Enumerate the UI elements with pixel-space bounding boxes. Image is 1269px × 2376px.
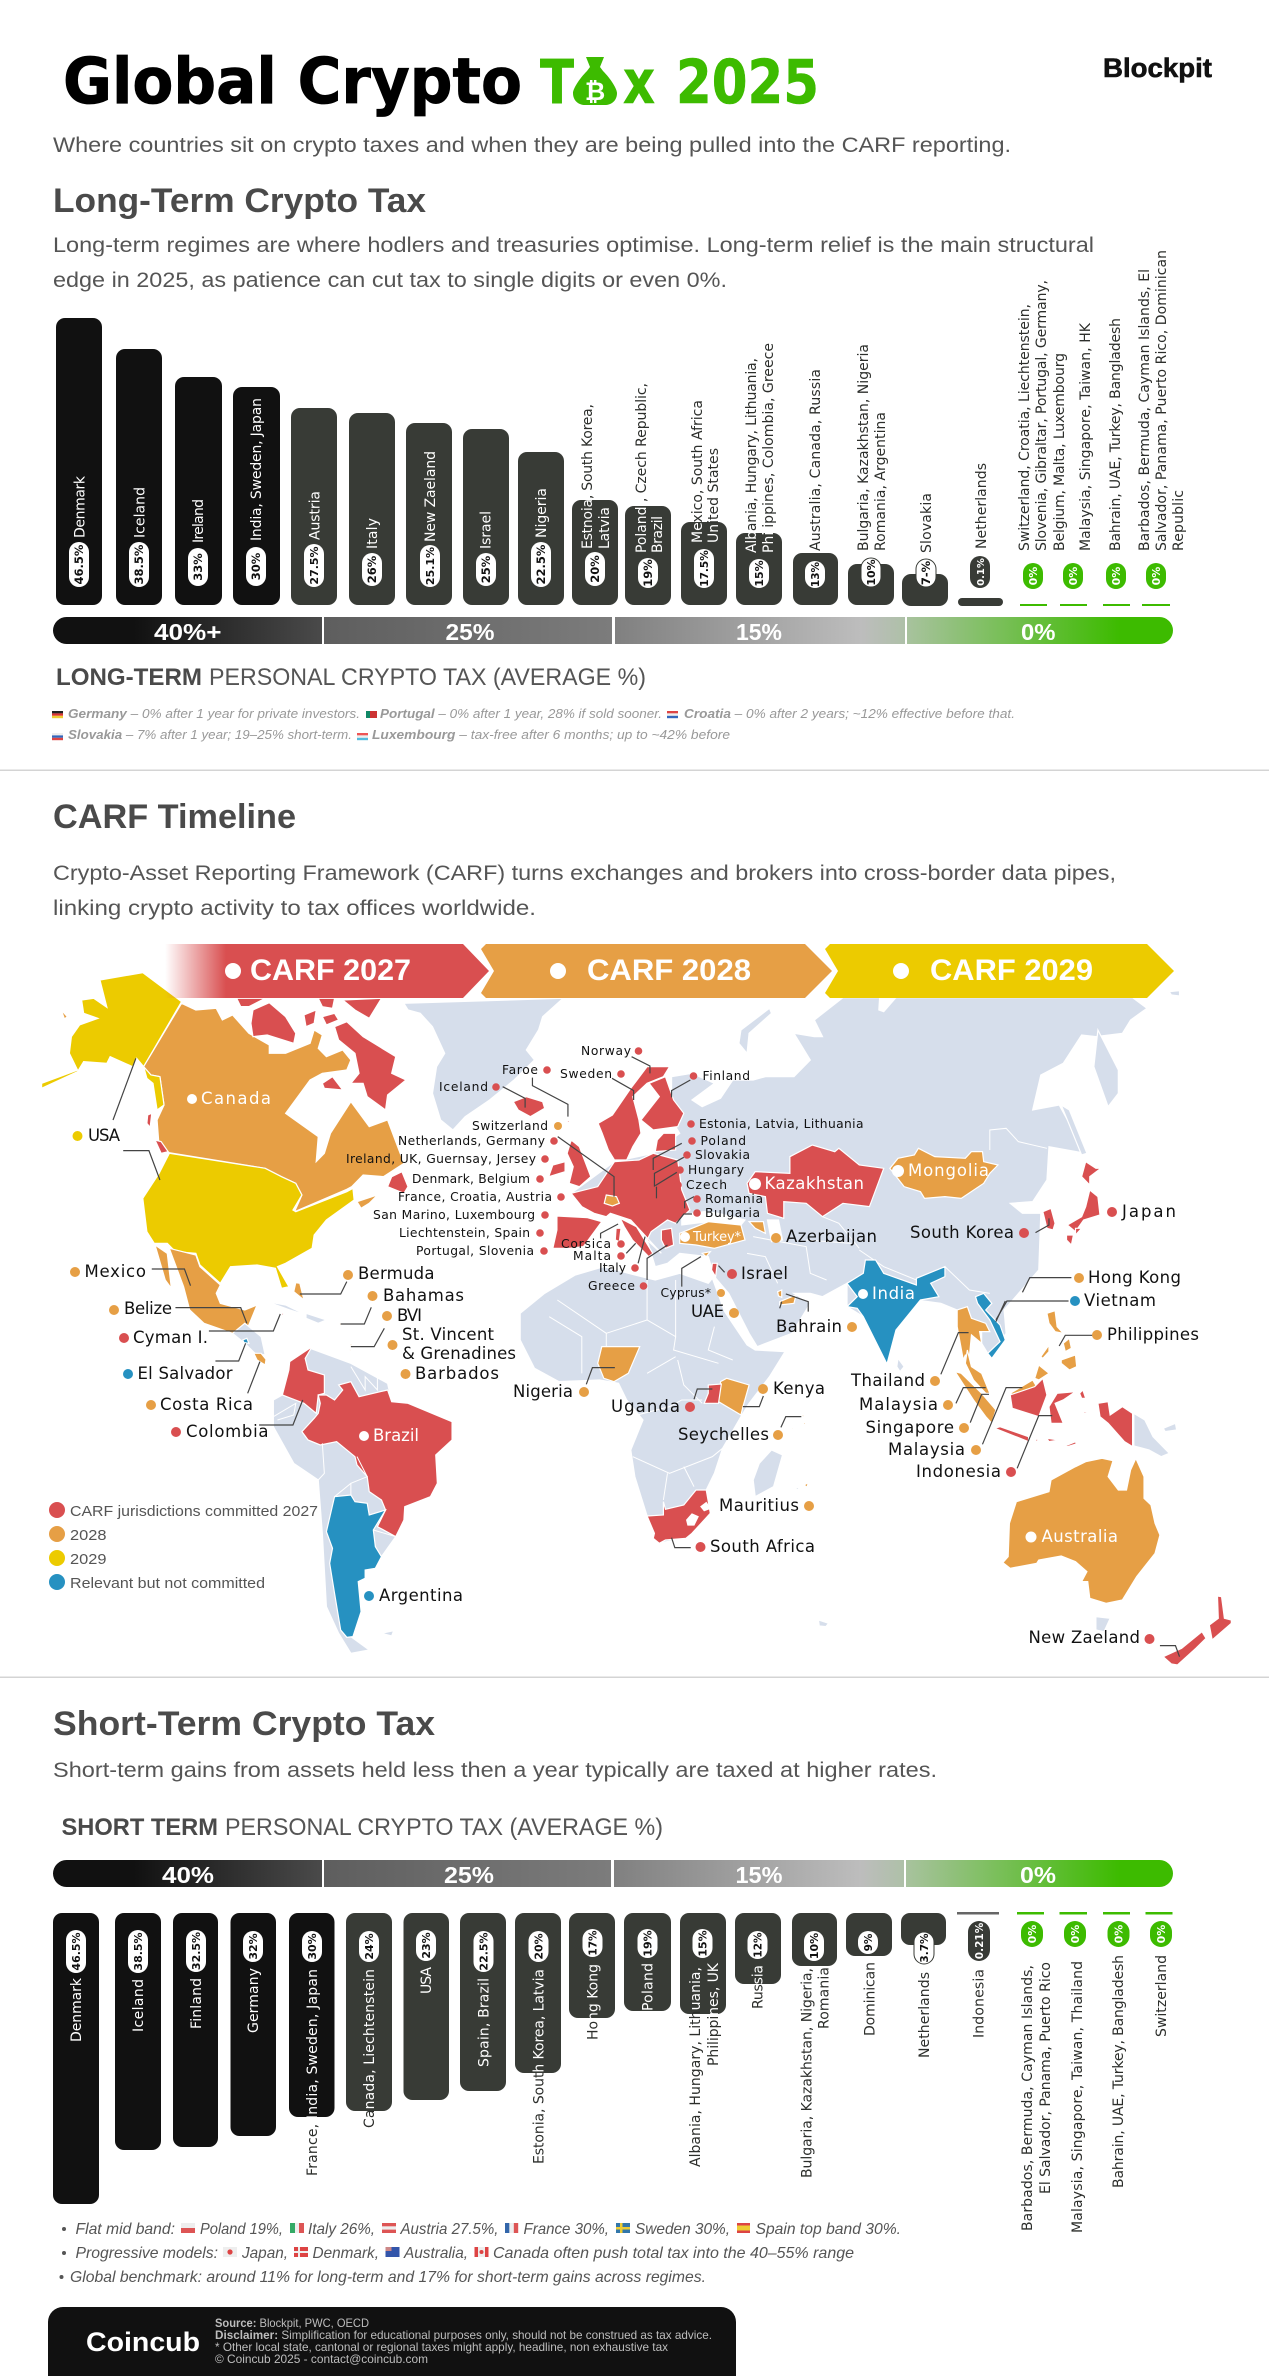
logo: Coincub: Coincub	[86, 2327, 200, 2357]
map: africa	[520, 1267, 829, 1627]
bar chart: long-term tax: 27.5%	[308, 546, 321, 585]
map labels: africa, asia, oceania: Japan	[1121, 1202, 1176, 1221]
bar chart: short-term tax: 12%	[752, 1932, 764, 1958]
map labels: africa, asia, oceania: Hong Kong	[1088, 1268, 1181, 1287]
bullet notes: Austria 27.5%,	[400, 2221, 498, 2238]
bar chart: short-term tax: 0%	[1155, 1925, 1168, 1943]
map labels: small europe: Liechtenstein, Spain	[399, 1226, 530, 1240]
map labels: americas: Bahamas	[383, 1286, 464, 1305]
heading: short-term crypto tax: Short-Term Crypto Tax	[53, 1705, 435, 1743]
long-term intro text	[53, 234, 1094, 292]
map labels: small europe: Italy	[599, 1261, 626, 1275]
map labels: africa, asia, oceania: Thailand	[850, 1371, 925, 1390]
country labels: New Zaeland	[423, 451, 439, 542]
map labels: small europe: Portugal, Slovenia	[416, 1244, 534, 1258]
map labels: africa, asia, oceania: Israel	[741, 1264, 788, 1283]
country labels: Brazil	[650, 516, 666, 553]
map: eurasia	[549, 991, 1180, 1363]
map labels: africa, asia, oceania: Azerbaijan	[786, 1227, 877, 1246]
short-term intro text: Short-term gains from assets held less then a year typically are taxed at higher rates.	[53, 1759, 937, 1782]
map labels: americas: St. Vincent	[402, 1325, 495, 1344]
map labels: americas: Barbados	[415, 1364, 499, 1383]
title	[63, 45, 819, 118]
bar chart: short-term tax: 10%	[808, 1933, 821, 1959]
country labels: Russia	[750, 1965, 766, 2009]
map labels: small europe: Greece	[588, 1279, 635, 1293]
bar chart: long-term tax: 30%	[249, 552, 263, 580]
country labels: Latvia	[597, 507, 613, 549]
bar chart: short-term tax: 23%	[420, 1932, 433, 1959]
country labels	[72, 250, 1187, 553]
map labels: small europe: Malta	[573, 1249, 611, 1263]
country labels: USA	[419, 1967, 435, 1994]
chevron: CARF 2029	[825, 944, 1174, 998]
country labels: India, Sweden, Japan	[249, 398, 265, 541]
map labels: small europe: Sweden	[560, 1067, 612, 1081]
bar chart: long-term tax: 46.5%	[72, 544, 86, 584]
CARF intro text	[53, 862, 1116, 920]
map legend: 2028	[70, 1527, 106, 1544]
footer	[48, 2307, 736, 2376]
bar chart: long-term tax: 25.1%	[424, 547, 437, 585]
value pills	[66, 1921, 1172, 1973]
map labels: small europe	[346, 1044, 864, 1300]
rate band: short-term: 15%	[736, 1862, 782, 1888]
country labels: Romania, Argentina	[873, 412, 889, 551]
country labels: Estnoia, South Korea,	[580, 404, 596, 549]
country labels: Spain, Brazil	[476, 1978, 492, 2067]
map labels: americas: & Grenadines	[402, 1344, 516, 1363]
CARF intro text: linking crypto activity to tax offices worldwide.	[53, 897, 536, 920]
map labels: africa, asia, oceania: Vietnam	[1084, 1291, 1156, 1310]
long-term intro text: Long-term regimes are where hodlers and treasuries optimise. Long-term relief is the main structural	[53, 234, 1094, 257]
country labels: Barbados, Bermuda, Cayman Islands, El	[1137, 269, 1153, 551]
icon: bitcoin money bag: ₿	[585, 78, 605, 106]
map labels: americas	[70, 1089, 516, 1605]
rate band: short-term: 25%	[444, 1862, 494, 1888]
logo: Blockpit: Blockpit	[1103, 53, 1212, 83]
footnotes: long-term exceptions: Portugal – 0% after 1 year, 28% if sold sooner.	[380, 706, 662, 721]
footer sources and disclaimer: * Other local state, cantonal or regional taxes might apply, headline, non exhaustive tax	[215, 2340, 668, 2354]
map labels: small europe: Poland	[700, 1134, 746, 1148]
rate band: long-term: 40%+	[154, 619, 222, 645]
bar chart: long-term tax: 25%	[479, 555, 493, 583]
bullet notes: Australia,	[403, 2245, 468, 2262]
bullet notes	[60, 2221, 901, 2286]
heading: long-term crypto tax: Long-Term Crypto Tax	[53, 182, 426, 220]
map labels: africa, asia, oceania: Philippines	[1107, 1325, 1199, 1344]
map labels: americas: Brazil	[373, 1426, 419, 1445]
country labels: Netherlands	[917, 1972, 933, 2058]
map labels: small europe: Slovakia	[695, 1148, 750, 1162]
bullet notes: Spain top band 30%.	[756, 2221, 901, 2238]
chevron: CARF 2027: CARF 2027	[250, 954, 411, 987]
country labels: Iceland	[131, 1979, 147, 2032]
map labels: africa, asia, oceania: Singapore	[866, 1418, 954, 1437]
long-term intro text: edge in 2025, as patience can cut tax to single digits or even 0%.	[53, 269, 727, 292]
map labels: small europe: Ireland, UK, Guernsay, Jersey	[346, 1152, 536, 1166]
bar chart: short-term tax: 38.5%	[132, 1932, 145, 1971]
bar chart: long-term tax: 0%	[1150, 567, 1163, 585]
map labels: small europe: France, Croatia, Austria	[398, 1190, 552, 1204]
map labels: small europe: Cyprus*	[660, 1286, 711, 1300]
country labels: Israel	[478, 511, 494, 549]
country labels: Dominican	[862, 1962, 878, 2036]
bar chart: long-term tax: 17.5%	[699, 550, 711, 587]
country labels: Poland	[640, 1963, 656, 2011]
map: north america	[42, 973, 570, 1333]
bar chart: short-term tax: 24%	[363, 1933, 376, 1960]
bar chart: short-term tax: 9%	[863, 1933, 875, 1951]
map legend: CARF jurisdictions committed 2027	[70, 1503, 318, 1520]
map labels: americas: Mexico	[84, 1262, 146, 1281]
footer sources and disclaimer: Source: Blockpit, PWC, OECD	[215, 2316, 369, 2330]
map labels: americas: Cyman I.	[133, 1328, 208, 1347]
footnotes: long-term exceptions: Luxembourg – tax-free after 6 months; up to ~42% before	[372, 727, 730, 742]
bar chart: long-term tax: 22.5%	[534, 544, 548, 584]
map: leader lines	[113, 1057, 1180, 1657]
map labels: small europe: Czech	[686, 1178, 727, 1192]
map labels: small europe: San Marino, Luxembourg	[373, 1208, 535, 1222]
map labels: africa, asia, oceania: Malaysia	[888, 1440, 965, 1459]
map labels: small europe: Switzerland	[472, 1119, 548, 1133]
country labels: Belgium, Malta, Luxembourg	[1052, 353, 1068, 551]
country labels: Philippines, Colombia, Greece	[761, 343, 777, 553]
rate band: long-term	[53, 617, 1173, 645]
rate band: short-term: 40%	[162, 1862, 214, 1888]
map labels: americas: Bermuda	[358, 1264, 434, 1283]
country labels: Germany	[246, 1968, 262, 2033]
bullet notes: France 30%,	[524, 2221, 609, 2238]
country labels: United States	[706, 448, 722, 543]
chart title: short-term: PERSONAL CRYPTO TAX (AVERAGE %)	[225, 1814, 663, 1841]
bar chart: long-term tax: 38.5%	[132, 544, 146, 584]
country labels: Canada, Liechtenstein	[362, 1969, 378, 2128]
CARF intro text: Crypto-Asset Reporting Framework (CARF) turns exchanges and brokers into cross-border data pipes,	[53, 862, 1116, 885]
map labels: americas: Costa Rica	[160, 1395, 253, 1414]
country labels: Slovenia, Gibraltar, Portugal, Germany,	[1034, 280, 1050, 551]
map labels: small europe: Norway	[581, 1044, 631, 1058]
map labels: small europe: Estonia, Latvia, Lithuania	[699, 1117, 864, 1131]
footnotes: long-term exceptions: Slovakia – 7% after 1 year; 19–25% short-term.	[68, 727, 352, 742]
bullet notes: Sweden 30%,	[635, 2221, 730, 2238]
title: x	[623, 47, 655, 118]
bar chart: long-term tax: 33%	[191, 553, 205, 581]
country labels: Malaysia, Singapore, Taiwan, Thailand	[1070, 1961, 1086, 2233]
CARF timeline chevrons	[165, 944, 1174, 998]
country labels: Bahrain, UAE, Turkey, Bangladesh	[1111, 1955, 1127, 2188]
country labels: Finland	[189, 1978, 205, 2029]
bar chart: short-term tax: 32.5%	[190, 1932, 203, 1970]
map labels: africa, asia, oceania: Malaysia	[859, 1395, 938, 1414]
bullet notes: Global benchmark: around 11% for long-term and 17% for short-term gains across regimes.	[70, 2269, 706, 2286]
country labels: Denmark	[72, 475, 88, 538]
map labels: small europe: Faroe	[502, 1063, 538, 1077]
bar chart: short-term tax: 15%	[696, 1930, 710, 1957]
world map: CARF commitments	[42, 973, 1231, 1665]
rate band: long-term: 25%	[446, 619, 494, 645]
country labels: Iceland	[132, 487, 148, 538]
bullet notes: Japan,	[241, 2245, 288, 2262]
map labels: americas: Colombia	[186, 1422, 268, 1441]
map labels: africa, asia, oceania: South Africa	[710, 1537, 815, 1556]
country labels: Ireland	[191, 499, 207, 543]
footnotes: long-term exceptions: Germany – 0% after 1 year for private investors.	[68, 706, 360, 721]
bar chart: short-term tax: 3.7%	[919, 1933, 931, 1963]
heading: CARF timeline: CARF Timeline	[53, 798, 296, 836]
bar chart: long-term tax: 15%	[753, 560, 766, 587]
chart title: long-term: LONG-TERM	[56, 664, 202, 691]
bar chart: long-term tax: 13%	[810, 561, 822, 587]
map labels: africa, asia, oceania: Seychelles	[678, 1425, 769, 1444]
value pills	[69, 542, 1166, 589]
map labels: americas: Belize	[124, 1299, 172, 1318]
country labels: Bulgaria, Kazakhstan, Nigeria,	[800, 1968, 816, 2178]
icon: bitcoin money bag	[573, 57, 617, 106]
map labels: africa, asia, oceania: Turkey*	[692, 1230, 742, 1245]
map labels: small europe: Hungary	[688, 1163, 744, 1177]
bar chart: short-term tax: 22.5%	[478, 1932, 490, 1971]
bar chart: short-term tax: 32%	[247, 1933, 260, 1960]
footer sources and disclaimer: Disclaimer: Simplification for educational purposes only, should not be construed as tax advice.	[215, 2328, 712, 2342]
country labels	[69, 1955, 1170, 2233]
rate band: long-term: 15%	[736, 619, 782, 645]
bar chart: long-term tax: 0%	[1110, 567, 1123, 585]
map labels: africa, asia, oceania	[513, 1161, 1199, 1647]
map labels: africa, asia, oceania: South Korea	[910, 1223, 1014, 1242]
bar chart: long-term tax: 20%	[588, 555, 602, 583]
country labels: Salvador, Panama, Puerto Rico, Dominican	[1154, 250, 1170, 551]
map labels: africa, asia, oceania: Kenya	[773, 1379, 825, 1398]
bar chart: short-term tax: 0%	[1112, 1925, 1126, 1943]
title: 2025	[676, 47, 819, 118]
bar chart: short-term tax: 0%	[1069, 1925, 1082, 1943]
country labels: Switzerland, Croatia, Liechtenstein,	[1017, 304, 1033, 551]
map labels: americas: BVI	[397, 1306, 422, 1325]
map labels: africa, asia, oceania: Mauritius	[719, 1496, 799, 1515]
chart title: long-term: PERSONAL CRYPTO TAX (AVERAGE %)	[209, 664, 646, 691]
country labels: Mexico, South Africa	[690, 400, 706, 543]
title: Global Crypto	[63, 45, 522, 118]
country labels: Denmark	[69, 1977, 85, 2042]
bar chart: short-term tax: 30%	[306, 1933, 319, 1960]
map legend: Relevant but not committed	[70, 1575, 265, 1592]
footnotes: long-term exceptions	[52, 706, 1015, 742]
map labels: small europe: Romania	[705, 1192, 763, 1206]
bar chart: long-term tax: 0%	[1067, 567, 1080, 585]
bar chart: long-term tax: 0.1%	[976, 558, 987, 586]
chevron: CARF 2028: CARF 2028	[587, 954, 751, 987]
rate band: short-term	[53, 1860, 1173, 1888]
country labels: Netherlands	[974, 463, 990, 549]
chevron: CARF 2027	[165, 944, 489, 998]
map labels: americas: USA	[88, 1126, 121, 1145]
country labels: El Salvador, Panama, Puerto Rico	[1038, 1962, 1054, 2194]
map labels: africa, asia, oceania: Mongolia	[908, 1161, 989, 1180]
bullet notes: Poland 19%,	[200, 2221, 283, 2238]
map labels: africa, asia, oceania: New Zaeland	[1028, 1628, 1140, 1647]
map labels: small europe: Bulgaria	[705, 1206, 760, 1220]
map labels: africa, asia, oceania: Indonesia	[916, 1462, 1001, 1481]
bullet notes: Denmark,	[312, 2245, 379, 2262]
country labels: Philippines, UK	[706, 1962, 722, 2066]
map labels: small europe: Denmark, Belgium	[412, 1172, 530, 1186]
footnotes: long-term exceptions: Croatia – 0% after 2 years; ~12% effective before that.	[684, 706, 1015, 721]
country labels: Albania, Hungary, Lithuania,	[744, 358, 760, 553]
bar chart: long-term tax: 7-%	[919, 560, 933, 585]
country labels: Albania, Hungary, Lithuania,	[688, 1967, 704, 2167]
footer sources and disclaimer	[215, 2316, 712, 2366]
chart title: short-term: SHORT TERM	[62, 1814, 218, 1841]
map labels: americas: Canada	[201, 1089, 271, 1108]
bar chart: long-term tax: 0%	[1027, 567, 1040, 585]
country labels: Poland , Czech Republic,	[634, 383, 650, 553]
chevron: CARF 2028	[481, 944, 832, 998]
country labels: Malaysia, Singapore, Taiwan, HK	[1078, 322, 1094, 551]
map labels: africa, asia, oceania: Bahrain	[776, 1317, 842, 1336]
map labels: africa, asia, oceania: Australia	[1042, 1527, 1118, 1546]
map labels: small europe: Netherlands, Germany	[398, 1134, 545, 1148]
map labels: small europe: Iceland	[439, 1080, 488, 1094]
map labels: americas: El Salvador	[138, 1364, 233, 1383]
bar chart: short-term tax: 17%	[588, 1930, 600, 1956]
map: central and south america	[233, 1302, 452, 1653]
country labels: Slovakia	[919, 493, 935, 553]
rate band: short-term: 0%	[1020, 1862, 1056, 1888]
country labels: Australia, Canada, Russia	[808, 369, 824, 551]
country labels: Austria	[308, 491, 324, 540]
bar chart: short-term tax: 19%	[642, 1930, 654, 1957]
country labels: Switzerland	[1154, 1955, 1170, 2037]
country labels: France, India, Sweden, Japan	[305, 1969, 321, 2176]
country labels: Republic	[1171, 490, 1187, 551]
bar chart: short-term tax	[53, 1912, 1172, 2233]
map labels: small europe: Finland	[702, 1069, 750, 1083]
bar chart: long-term tax	[56, 250, 1187, 606]
country labels: Italy	[365, 518, 381, 549]
map legend	[49, 1502, 318, 1592]
subtitle: Where countries sit on crypto taxes and when they are being pulled into the CARF reporting.	[53, 134, 1011, 157]
bullet notes: Italy 26%,	[308, 2221, 375, 2238]
country labels: Barbados, Bermuda, Cayman Islands,	[1020, 1965, 1036, 2231]
country labels: Estonia, South Korea, Latvia	[532, 1969, 548, 2164]
bullet notes: Progressive models:	[76, 2245, 218, 2262]
country labels: Nigeria	[534, 488, 550, 538]
bar chart: short-term tax: 0%	[1026, 1925, 1039, 1943]
country labels: Bulgaria, Kazakhstan, Nigeria	[856, 344, 872, 551]
map labels: africa, asia, oceania: UAE	[691, 1302, 724, 1321]
map labels: africa, asia, oceania: Kazakhstan	[764, 1174, 864, 1193]
map labels: small europe: Corsica	[561, 1237, 611, 1251]
country labels: Indonesia	[972, 1969, 988, 2038]
map labels: africa, asia, oceania: Nigeria	[513, 1382, 573, 1401]
country labels: Hong Kong	[586, 1964, 602, 2040]
map labels: americas: Argentina	[379, 1586, 463, 1605]
title: T	[540, 47, 574, 118]
country labels: Bahrain, UAE, Turkey, Bangladesh	[1108, 318, 1124, 551]
country labels: Romania	[816, 1967, 832, 2029]
footer sources and disclaimer: © Coincub 2025 - contact@coincub.com	[215, 2352, 428, 2366]
bar chart: long-term tax: 19%	[641, 559, 655, 587]
bar chart: short-term tax: 20%	[532, 1933, 546, 1960]
map legend: 2029	[70, 1551, 106, 1568]
bar chart: long-term tax: 26%	[365, 555, 379, 583]
chevron: CARF 2029: CARF 2029	[930, 954, 1093, 987]
bar chart: short-term tax: 46.5%	[70, 1932, 83, 1971]
map: south and southeast asia, oceania	[778, 1260, 1231, 1665]
bullet notes: Canada often push total tax into the 40–55% range	[493, 2245, 854, 2262]
bar chart: short-term tax: 0.21%	[974, 1922, 986, 1959]
bullet notes: Flat mid band:	[76, 2221, 175, 2238]
rate band: long-term: 0%	[1021, 619, 1056, 645]
map labels: africa, asia, oceania: Uganda	[611, 1397, 680, 1416]
bar chart: long-term tax: 10%	[865, 559, 878, 586]
map labels: africa, asia, oceania: India	[872, 1284, 915, 1303]
